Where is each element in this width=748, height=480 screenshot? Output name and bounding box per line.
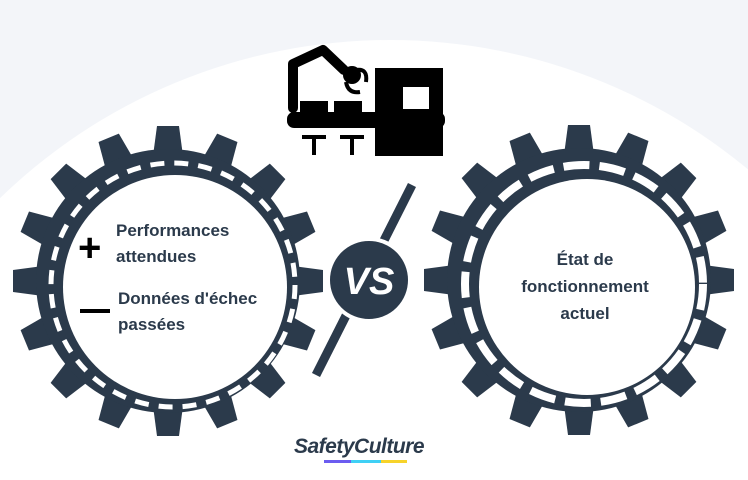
slash divider [316, 185, 412, 375]
logo: SafetyCulture [294, 435, 424, 458]
text: données d'échec passées: passées [118, 315, 185, 334]
left gear [13, 126, 323, 436]
text: données d'échec passées: Données d'échec [118, 289, 257, 308]
right gear text: actuel [560, 304, 610, 323]
vs badge [328, 239, 410, 321]
vs badge: VS [344, 261, 394, 303]
text: performances attendues [116, 221, 229, 266]
minus icon [80, 309, 110, 313]
text: données d'échec passées [118, 289, 257, 334]
right gear text: fonctionnement [521, 277, 649, 296]
right gear text: État de [557, 250, 613, 269]
right gear text [521, 250, 649, 323]
right gear [424, 125, 734, 435]
text: performances attendues: attendues [116, 247, 196, 266]
left gear text [78, 221, 257, 334]
icon: factory robot [287, 50, 445, 156]
text: performances attendues: Performances [116, 221, 229, 240]
plus icon: + [78, 226, 101, 270]
